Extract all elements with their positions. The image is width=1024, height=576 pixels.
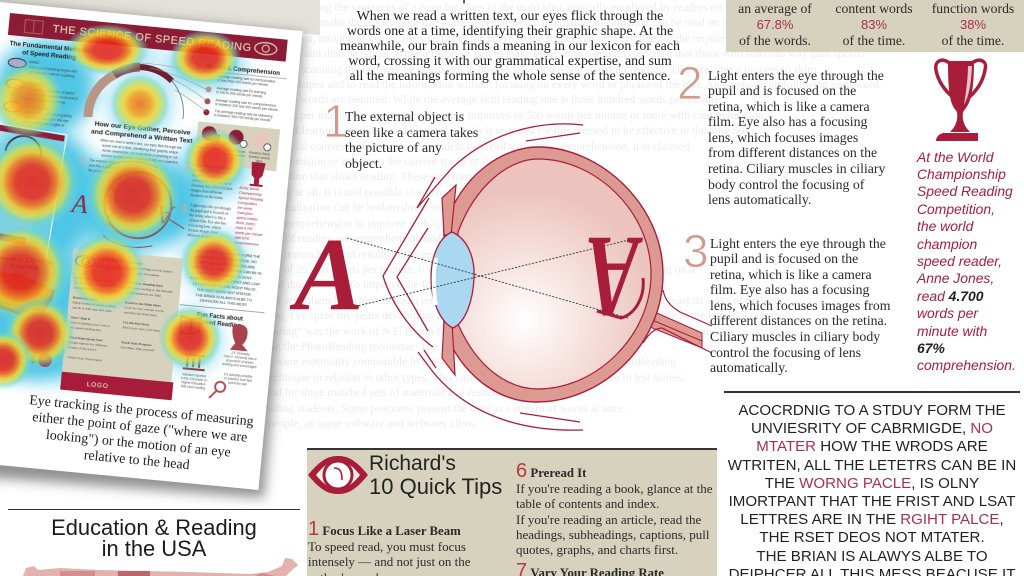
world champion note: speed reader, xyxy=(917,253,1002,269)
tips mini panel: intensely and not just on words xyxy=(74,285,118,294)
tan box with pie icons: 83% xyxy=(231,157,238,161)
tips mini panel: Move your eyes a bit faster xyxy=(122,325,161,333)
world champion text: the world xyxy=(237,206,253,211)
steps mini text: 2 xyxy=(183,159,192,174)
steps mini text: the retina, which is like a xyxy=(189,213,226,222)
world champion note: minute with xyxy=(917,323,987,339)
panel: scrambled word study: IMORTPANT THAT THE FRIST AND LSAT xyxy=(729,493,1015,510)
tip 6: table of contents and index. xyxy=(516,496,659,511)
step 3: Light enters the eye through the xyxy=(710,236,886,250)
stat: function words xyxy=(932,1,1014,48)
world champion note: read 4.700 xyxy=(917,288,983,304)
steps mini text: camera film. Eye also has xyxy=(189,218,227,226)
left rule and section heading: education and reading: Education & Reading xyxy=(51,514,257,540)
left section: fundamental methods: Skimming is a process of speed xyxy=(27,87,75,96)
steps mini text: Light enters the eye through xyxy=(193,163,234,171)
stat: content words: of the time. xyxy=(843,33,905,48)
tips mini panel: Breathing Freely xyxy=(73,295,99,302)
speed and comprehension: is between 400-700 words per minute xyxy=(214,113,271,122)
fun facts: to practice how fast xyxy=(224,376,252,383)
stat: average of words xyxy=(738,1,812,48)
tips mini panel: format of the source xyxy=(68,345,97,352)
tips mini panel: Pace your reading to the material xyxy=(126,285,173,294)
panel: scrambled word study: WTRITEN, ALL THE LETETRS CAN BE IN xyxy=(728,457,1016,474)
tips mini panel: Dodge regions for different xyxy=(69,340,107,348)
letter A: A xyxy=(290,217,363,332)
faint background article text: A reader will be instructed to use a finger or pen to make these shapes and to read the information without focusing on every word or phrase of the text. An emphasis on following each word. xyxy=(0,78,882,91)
tips title xyxy=(369,452,502,498)
faint background article text: Speed reading with a given text has been examined by many researchers and results of the test are mixed with comprehension loss. xyxy=(0,248,607,260)
left section: fundamental methods: SKIMMING xyxy=(27,82,45,88)
stat: function words: function words xyxy=(932,1,1014,16)
world champion note: comprehension. xyxy=(917,357,1016,373)
dollar pie mini xyxy=(29,352,53,368)
step 2: lens, which focuses images xyxy=(708,130,858,145)
steps mini text: seen like a camera takes xyxy=(89,163,124,171)
tips mini panel: Preread It xyxy=(128,261,142,266)
intro paragraph: word, crossing it with our grammatical expertise, and sum xyxy=(348,54,672,69)
fun facts: John F. Kennedy was a xyxy=(223,354,257,361)
eyeball wall xyxy=(444,147,663,402)
world champion text: Championship xyxy=(239,191,262,197)
faint background article text: Reading comprehension is tested by means of a specific test comprehension to improve with speed reading training courses. xyxy=(0,217,576,230)
tips mini panel: Read for the Main Ideas xyxy=(125,300,162,308)
intro paragraph xyxy=(340,8,680,84)
tips mini panel xyxy=(60,248,185,400)
poster content xyxy=(0,10,291,408)
left section: fundamental methods: reducing the habit of vocalizing xyxy=(28,70,75,79)
poster caption xyxy=(24,393,254,479)
lens xyxy=(431,232,474,328)
left section: fundamental methods: Meta guiding is a visual guiding xyxy=(24,110,72,118)
world champion text: champion xyxy=(237,211,253,216)
steps mini text: images from different xyxy=(191,188,222,195)
poster sheet and shadow xyxy=(0,0,320,506)
step 1: object. xyxy=(345,156,382,170)
iris and ciliary body xyxy=(442,185,456,375)
intro paragraph: all the meanings forming the whole sense of the sentence. xyxy=(350,69,670,84)
speed and comprehension: Average reading rate for memorization xyxy=(218,74,276,84)
heading: how our eye gather: lexicon for each word, crossing it with our expertise xyxy=(101,153,178,165)
according to a study text: LETTRES ARE IN THE RGIHT PALCE, xyxy=(193,282,257,292)
faint background article text: Subvocalization can be used on less than all the words; subvocalization can be broken down into sections in the process of speed reading. xyxy=(0,201,638,214)
tan box with pie icons: 38% xyxy=(255,159,262,164)
world champion text: comprehension. xyxy=(234,241,260,247)
fun facts: Fun Facts about xyxy=(196,312,243,323)
world champion note xyxy=(916,148,1016,373)
steps mini text: focuses images from xyxy=(188,228,218,235)
heading: how our eye gather: At the meanwhile, our brain finds a meaning in our xyxy=(102,149,179,160)
tip 1 xyxy=(308,518,470,576)
cool heat map layer xyxy=(0,36,258,394)
faint background article text: Method claimed by Professor Edward Thorndike that speeds of 25,000 words per minute. It is a focus on the words. I, and read. Instead focusing on it. xyxy=(0,263,698,276)
tan box with pie icons: an average of xyxy=(197,150,218,156)
speed and comprehension: is less than 100 words per minute xyxy=(217,78,268,87)
stat: function words: of the time. xyxy=(942,33,1004,48)
according to a study text xyxy=(188,249,264,308)
world champion note: Anne Jones, xyxy=(917,270,994,286)
step 3: film. Eye also has a focusing xyxy=(710,282,869,297)
heading: how our eye gather: words one at a time, identifying their graphic shape. xyxy=(102,143,179,155)
tips mini panel: not all materials are alike xyxy=(126,290,162,298)
intro paragraph: meanwhile, our brain finds a meaning in our lexicon for each xyxy=(340,39,680,54)
tips mini panel: all, speed reading also xyxy=(70,325,102,333)
steps mini text: the pupil and is focused on xyxy=(193,168,232,176)
step 2: retina, which is like a camera xyxy=(708,99,870,114)
faint background article text: Readers looking for information, reading for pleasure, or simply scanning the text will be instructed in how to slow down and speed up reading. This executes a process to skim. xyxy=(0,63,819,76)
tips title: 10 Quick Tips xyxy=(369,474,502,498)
tan box with pie icons: function words xyxy=(249,155,270,161)
stat: average of words: an average of xyxy=(738,1,812,16)
tips mini panel: Track Your Progress xyxy=(121,340,152,347)
world champion note: the world xyxy=(917,218,973,234)
icon: trophy xyxy=(934,58,988,141)
step 3: control the focusing of lens xyxy=(710,345,861,360)
poster caption: looking") or the motion of an eye xyxy=(45,428,231,461)
fun facts: Speed Reading xyxy=(197,319,241,330)
speed and comprehension: Average reading rate for learning xyxy=(217,86,266,95)
panel: scrambled word study: ACOCRDNIG TO A STDUY FORM THE xyxy=(738,402,1006,419)
heading: how our eye gather: How our Eye Gather, Perceive xyxy=(94,121,191,137)
world champion note: Speed Reading xyxy=(917,183,1013,199)
tips mini panel: Subvocalizing is not a sin at xyxy=(70,320,110,328)
panel: Richard's 10 quick tips xyxy=(307,448,717,576)
faint background article text: long expert showed a greater benefit of reading with this technique in relation to other types. This case was accompanied by a decline in test scores. xyxy=(0,371,685,384)
step 2: lens automatically. xyxy=(708,192,811,207)
dotted sight lines xyxy=(345,238,637,318)
speed and comprehension: The average reading rate for skimming xyxy=(214,109,273,119)
step 2: film. Eye also has a focusing xyxy=(708,114,867,129)
small letters A: A xyxy=(69,189,89,219)
poster caption: relative to the head xyxy=(83,448,190,473)
eyelids and cornea xyxy=(383,124,583,430)
tips mini panel: To speed read, you must focus xyxy=(74,280,118,290)
poster caption: either the point of gaze ("where we are xyxy=(32,410,248,446)
tan box with pie icons: content words xyxy=(224,152,245,158)
steps mini text xyxy=(74,149,235,241)
steps mini text: camera film. Eye also has a xyxy=(192,178,232,186)
tip 6: 6 Preread It xyxy=(516,460,586,482)
left section: fundamental methods: The Fundamental Methods xyxy=(9,40,91,55)
according to a study text: THE RSET DEOS NOT MTATER. xyxy=(197,288,252,297)
left section: fundamental methods: BASIC xyxy=(29,60,40,65)
world champion note: 67% xyxy=(917,340,945,356)
tips mini panel: and then the main ideas xyxy=(124,310,158,318)
USA map xyxy=(23,558,298,576)
faint background article text: Some theories concerning the claim that this improves comprehension or improves the current speed of the reader. xyxy=(0,155,530,168)
left section: fundamental methods: reading that involves visual search xyxy=(26,92,78,101)
steps mini text: focusing lens, which focuses xyxy=(191,183,233,192)
panel: scrambled word study: THE RSET DEOS NOT MTATER. xyxy=(759,529,985,546)
faint background article text: Computer programs are available to help instruct speed reading students. Some programs present the data as a stream of words at once. xyxy=(0,402,627,415)
according to a study text: DEIPHCER ALL THIS MESS xyxy=(200,299,247,307)
world champion text: read 4.700 xyxy=(235,226,253,231)
faint background article text: The average speed of a person reading a text is about 250 words per minute but one trained program improves to 500 words per minute or more with comprehension. xyxy=(0,109,767,122)
fun facts: in the Chronicle of xyxy=(181,376,207,383)
dollar pie mini: $ xyxy=(29,354,37,366)
fun facts: Harvard reported xyxy=(182,372,207,378)
faint background article text: results. There is also an effort to lay such a stream before people, as some software and websites allow. xyxy=(0,417,478,430)
optic nerve xyxy=(643,290,712,353)
step 2 xyxy=(677,57,886,207)
step 3: 3 xyxy=(683,225,709,277)
tips mini panel: 10 Quick Tips xyxy=(96,262,135,273)
tips mini panel: can do it with ease and calm xyxy=(72,305,112,313)
fun facts: someone can xyxy=(228,381,247,386)
steps mini text: different distances. xyxy=(187,233,215,240)
tips mini panel: Look for key concept words xyxy=(124,305,164,313)
faint background article text: which is not thought to be helpful; the reader uses the process of learning, reading word by word, which is required for this method to be effective in the long run. xyxy=(0,124,751,137)
tips mini panel: at the table of contents xyxy=(127,270,160,278)
panel: scrambled word study: THE BRIAN IS ALAWYS ALBE TO xyxy=(756,548,988,565)
panel: scrambled word study: MTATER HOW THE WRODS ARE xyxy=(756,438,988,455)
tips title: Richard's xyxy=(369,452,456,475)
faint background article text: of the text which emphasis is placed on the meaning, and not all words are required. While the average skill reading rate is three hundred words per minute. xyxy=(0,93,722,106)
tip 6: quotes, graphs, and charts first. xyxy=(516,542,678,557)
steps mini text: the retina, which is like a xyxy=(192,173,229,182)
faint background article text: skimming is a process of speed reading that involves visually searching the sentences of a page for clues to the main idea, typically employed by readers on the Web. The method has become much more common today. xyxy=(0,1,1011,14)
education heading: in the USA xyxy=(9,263,38,272)
left section: fundamental methods: moves along the lengths of xyxy=(23,120,64,128)
world champion note: At the World xyxy=(917,148,993,164)
according to a study text: IMORTPANT THAT THE FRIST AND LSAT xyxy=(190,276,261,287)
icon: eye xyxy=(308,456,368,494)
eye diagram xyxy=(290,123,712,431)
steps mini text: distances on the retina. xyxy=(190,193,223,200)
panel: scrambled word study: UNVIESRITY OF CABRMIGDE, NO xyxy=(751,420,993,437)
tan box with pie icons xyxy=(194,122,280,171)
inset mini poster xyxy=(0,120,67,263)
mini USA map xyxy=(0,272,55,315)
education heading xyxy=(0,255,53,273)
faint background article text: readers employed by the Nile Delta use a method of meta guiding to make the reader skim due to the speed at which alternative information can be read on the screen and paper. xyxy=(0,16,819,29)
tips mini panel: Use timer, time yourself xyxy=(120,345,155,353)
inverted letter A: A xyxy=(585,212,644,343)
tips mini panel: If you're reading a book, glance xyxy=(128,266,173,275)
step 2: Light enters the eye through the xyxy=(708,68,884,82)
step 1: 1 xyxy=(323,95,349,147)
faint background article text: the reader can move rapidly through the text using a finger or a pen, moving along the lines and over the curve so the reader can see each line for the required information. xyxy=(0,32,792,45)
panel: scrambled word study xyxy=(724,391,1020,576)
faint background article text: Author of Learning Strategies. A company called Subliminal with them,[5] which Schools release. PhotoReading differs from their system in at least its ways of delivery. xyxy=(0,294,786,307)
panel: tilted poster thumbnail xyxy=(0,13,288,473)
stat: average of words: 67.8% xyxy=(757,17,793,32)
speed and comprehension: is 100 to 200 words per minute xyxy=(216,90,263,99)
heading: how our eye gather xyxy=(89,120,194,166)
tips mini panel: Vary Your Reading Rate xyxy=(127,280,164,288)
according to a study text: THE BRIAN IS ALAWYS ALBE TO xyxy=(195,293,252,303)
according to a study text: MTATER HOW THE WRODS ARE xyxy=(199,260,256,270)
fun facts xyxy=(171,305,264,402)
stat: content words: content words xyxy=(835,1,913,16)
tips mini panel: Mind Reprogram Fast xyxy=(69,335,104,342)
world champion note: words per xyxy=(917,305,978,321)
world champion text: words per minute xyxy=(235,231,263,237)
left section: fundamental methods: with a finger or a pen, the eye xyxy=(24,115,69,123)
heading: how our eye gather: When we read a written text, our eyes flick through the xyxy=(100,138,182,150)
left section: fundamental methods: of the sentences of a page xyxy=(26,97,66,105)
world champion text xyxy=(233,186,267,247)
fun facts: It's actually possible xyxy=(224,372,253,379)
step 2: 2 xyxy=(677,57,703,109)
tip 6: If you're reading an article, read the xyxy=(516,512,701,527)
faint background article text: Readers of the effect of the text have been tested. The effects of reading on comprehension and on reading time have been studied with the test. xyxy=(0,232,665,245)
steps mini text: the pupil and is focused on xyxy=(190,208,229,216)
tip 6 xyxy=(516,460,713,557)
step 1: seen like a camera takes xyxy=(345,124,478,140)
poster header bar xyxy=(8,13,288,62)
poster caption: Eye tracking is the process of measuring xyxy=(29,393,254,430)
left rule and section heading: education and reading: in the USA xyxy=(102,536,206,560)
left section: fundamental methods: Basic speed reading begins with xyxy=(29,65,78,74)
faint background article text: who uses the program will be shown a pattern of lines and words and then be taught to use a finger or pen to make these shapes and it is reported that those who read this way gain speed. xyxy=(0,47,863,60)
tips mini panel: Use the Pen Trick xyxy=(123,320,149,327)
tip 1: To speed read, you must focus xyxy=(308,539,466,554)
tip 6: headings, subheadings, captions, pull xyxy=(516,527,710,542)
fun facts: that slow reading xyxy=(181,384,205,390)
according to a study text: ACOCRDNIG TO A STDUY FORM THE xyxy=(195,249,261,259)
tips mini panel: LOGO xyxy=(86,381,109,390)
tips mini panel: Focus Like a Laser Beam xyxy=(75,275,113,283)
steps mini text: Light enters the eye through xyxy=(190,203,231,211)
faint background article text: There results clearly indicate that there is no benefit to using the PhotoReading technique. The extremely rapid reading rates claimed by xyxy=(0,340,630,353)
step 2: pupil and is focused on the xyxy=(708,83,856,98)
left rule and section heading: education and reading xyxy=(8,509,300,559)
faint background article text: for three matched sets of materials. These results were found for three matched sets of materials and readers. xyxy=(0,386,504,399)
tan box with pie icons: Readers fixate xyxy=(224,148,246,154)
small red trophy xyxy=(250,162,266,187)
left section: fundamental methods: META GUIDING xyxy=(25,105,50,111)
fun facts: Higher Education xyxy=(181,380,206,386)
step 1: The external object is xyxy=(345,109,464,124)
step 2: from different distances on the xyxy=(708,145,877,160)
tips mini panel: Don't Skip It xyxy=(71,315,92,321)
tan box with pie icons: Readers fixate xyxy=(249,151,271,157)
world champion note: Competition, xyxy=(917,201,995,217)
speed and comprehension: Average reading rate for comprehension xyxy=(215,98,276,108)
faint background article text: Another common with the phrase Photo reading a quantity of data at once. To improve the form of reading with peripheral vision. xyxy=(0,278,602,291)
world champion note: Championship xyxy=(917,166,1006,182)
tips mini panel: Richard's xyxy=(96,255,123,265)
faint background article text: Acceleration, brain-based learning and subliminal processing. I've spent my years developing a program to capture the capacity and put it reliably in the hands of people. xyxy=(0,309,784,322)
panel: fixation statistics xyxy=(726,0,1024,52)
left section: fundamental methods: of Speed Reading xyxy=(22,49,76,62)
fun facts: proponent of speed xyxy=(226,358,254,365)
fun facts: J.F. Kennedy xyxy=(231,351,250,357)
world champion text: Anne Jones, xyxy=(235,221,256,227)
faint background article text: A study by NASA titled "Preliminary Analysis of PhotoReading" was the work of N.F. Dixon from England and P. Lozicki at Tulsa University, Oklahoma. xyxy=(0,325,717,338)
stat: content words xyxy=(835,1,913,48)
tip 1: 1 Focus Like a Laser Beam xyxy=(308,518,461,540)
stat: function words: 38% xyxy=(960,17,986,32)
step 3 xyxy=(683,225,890,375)
intro paragraph: words one at a time, identifying their graphic shape. At the xyxy=(347,24,673,39)
faint background article text: PhotoReading were not observed; indeed, the reading rates were essentially comparable to those for normal reading. Moreover, the PhotoReading xyxy=(0,355,676,368)
world champion text: Competition, xyxy=(238,201,258,207)
tips mini panel: Widen Your Vision Span xyxy=(67,355,102,362)
step 3: different distances on the retina. xyxy=(710,313,887,328)
tips mini panel: Many readers of speed reading xyxy=(72,300,116,308)
according to a study text: THE WORNG PACLE, IS OLNY xyxy=(200,271,253,280)
small eye diagram xyxy=(98,159,190,252)
poster header bar: THE SCIENCE OF SPEED READING xyxy=(52,23,252,54)
fun facts: reading and encouraged xyxy=(222,362,257,369)
step 2: body control the focusing of xyxy=(708,177,864,192)
steps mini text: a focusing lens, which xyxy=(188,223,221,231)
gauge arc chart xyxy=(88,67,183,119)
according to a study text: WTRITEN, ALL THE LETETRS CAN BE IN xyxy=(191,265,262,276)
tan box with pie icons: 67.8% xyxy=(202,154,212,159)
world champion text: At the World xyxy=(238,186,260,192)
according to a study text: UNVIESRITY OF CABRMIGDE, NO xyxy=(198,255,257,264)
steps mini text: The external object is xyxy=(89,158,121,165)
step 3: automatically. xyxy=(710,360,788,375)
step 3: retina, which is like a camera xyxy=(710,267,872,282)
steps mini text: the picture of any object. xyxy=(88,168,124,176)
faint background article text: there is no evidence that less subvocalization improves reading at all. It is still possible to subvocalize and speed read. xyxy=(0,186,547,199)
speed and comprehension: is between 200 and 400 words per minute xyxy=(215,102,278,112)
speed and comprehension xyxy=(199,63,288,124)
tan box with pie icons: Readers fixate xyxy=(197,146,219,152)
steps mini text: 3 xyxy=(179,201,188,216)
speed and comprehension: Speed & Comprehension xyxy=(206,63,281,77)
heading: how our eye gather: and Comprehend a Written Text xyxy=(91,128,194,145)
world champion note: champion xyxy=(917,236,977,252)
left section: fundamental methods xyxy=(2,40,91,130)
faint background article text: and, with training programs that are available through commercial courses and software, the student can read with 70% comprehension, it is claimed. xyxy=(0,140,693,153)
intro paragraph: When we read a written text, our eyes flick through the xyxy=(357,8,663,24)
panel: scrambled word study: LETTRES ARE IN THE RGIHT PALCE, xyxy=(740,511,1004,528)
step 2: retina. Ciliary muscles in ciliary xyxy=(708,161,885,176)
panel: scrambled word study: THE WORNG PACLE, IS OLNY xyxy=(765,475,979,492)
steps mini text: 1 xyxy=(80,153,88,168)
faint background article text: of subvocalization is not suggested in any form of subvocalization that slows reading. These statements on this are not all proved. xyxy=(0,170,601,183)
stat: average of words: of the words. xyxy=(739,33,811,48)
tip 1: intensely — and not just on the xyxy=(308,554,470,569)
step 1 xyxy=(323,95,478,171)
step 1: the picture of any xyxy=(345,140,442,155)
stat: content words: 83% xyxy=(861,17,887,32)
small letters A: A xyxy=(156,199,177,230)
step 3: lens, which focuses images from xyxy=(710,298,890,313)
hot heat map overlay xyxy=(0,24,248,390)
gauge leader lines xyxy=(140,63,208,112)
tip 6: If you're reading a book, glance at the xyxy=(516,481,713,496)
world champion text: with 67% xyxy=(234,236,250,241)
world champion text: speed reader, xyxy=(236,216,259,222)
step 3: Ciliary muscles in ciliary body xyxy=(710,329,880,344)
step 3: pupil and is focused on the xyxy=(710,251,858,266)
world champion text: Speed Reading xyxy=(238,196,263,202)
small letters A xyxy=(68,189,177,230)
